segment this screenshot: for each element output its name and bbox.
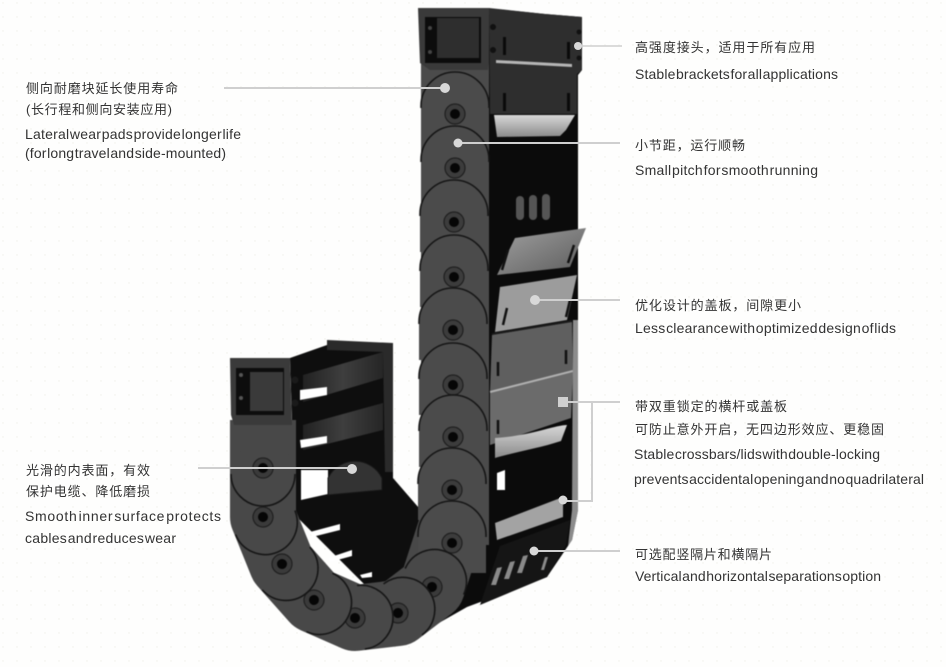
tilted lids [490, 228, 586, 458]
callout: separators [530, 546, 881, 584]
callout: lateral wear pads: Lateral wear pads provide longer life [25, 126, 241, 142]
callout: double-locking crossbars: prevents accidental opening and no quadrilateral [634, 471, 924, 487]
callout: lateral wear pads: (长行程和侧向安装应用) [26, 102, 172, 117]
top cover panels [489, 8, 582, 137]
callout: optimized lids: Less clearance with optimized design of lids [635, 320, 896, 336]
separator rollers [516, 194, 550, 220]
left arm side rail [327, 340, 393, 472]
callout: smooth inner surface [25, 463, 357, 546]
curved chain body [263, 420, 452, 618]
callout: double-locking crossbars: 可防止意外开启，无四边形效应、更稳固 [635, 422, 884, 437]
right column back panel [420, 8, 582, 628]
callout: double-locking crossbars [558, 397, 924, 504]
callout: lateral wear pads: (for long travel and side-mounted) [25, 145, 226, 161]
left arm crossbars [300, 352, 383, 578]
callout: small pitch: 小节距，运行顺畅 [635, 138, 745, 153]
vertical chain body [421, 60, 489, 545]
callout: lateral wear pads [25, 81, 450, 161]
left arm interior [290, 345, 430, 590]
callout: stable brackets: 高强度接头，适用于所有应用 [635, 40, 815, 55]
callout: smooth inner surface: cables and reduces wear [25, 530, 176, 546]
callout: double-locking crossbars: 带双重锁定的横杆或盖板 [635, 399, 787, 414]
illustration: energy chain [224, 8, 586, 654]
left mounting bracket [230, 358, 298, 478]
vertical run of link plates [418, 72, 489, 573]
top mounting bracket [418, 8, 496, 70]
callout: small pitch: Small pitch for smooth running [635, 162, 818, 178]
callout: smooth inner surface: 保护电缆、降低磨损 [26, 484, 150, 499]
callout: optimized lids: 优化设计的盖板，间隙更小 [635, 298, 801, 313]
lower window and lid [480, 320, 578, 605]
callout: optimized lids [530, 295, 896, 336]
callout: stable brackets [574, 40, 838, 82]
callout: stable brackets: Stable brackets for all applications [635, 66, 838, 82]
callout: separators: 可选配竖隔片和横隔片 [635, 547, 772, 562]
callout: smooth inner surface: Smooth inner surface protects [25, 508, 221, 524]
callout: smooth inner surface: 光滑的内表面，有效 [26, 463, 150, 478]
callout: small pitch [454, 138, 818, 178]
callout: double-locking crossbars: Stable crossbars/lids with double-locking [634, 446, 880, 462]
callout: separators: Vertical and horizontal separations option [635, 568, 881, 584]
callout: lateral wear pads: 侧向耐磨块延长使用寿命 [26, 81, 178, 96]
curved run of link plates [224, 442, 477, 654]
